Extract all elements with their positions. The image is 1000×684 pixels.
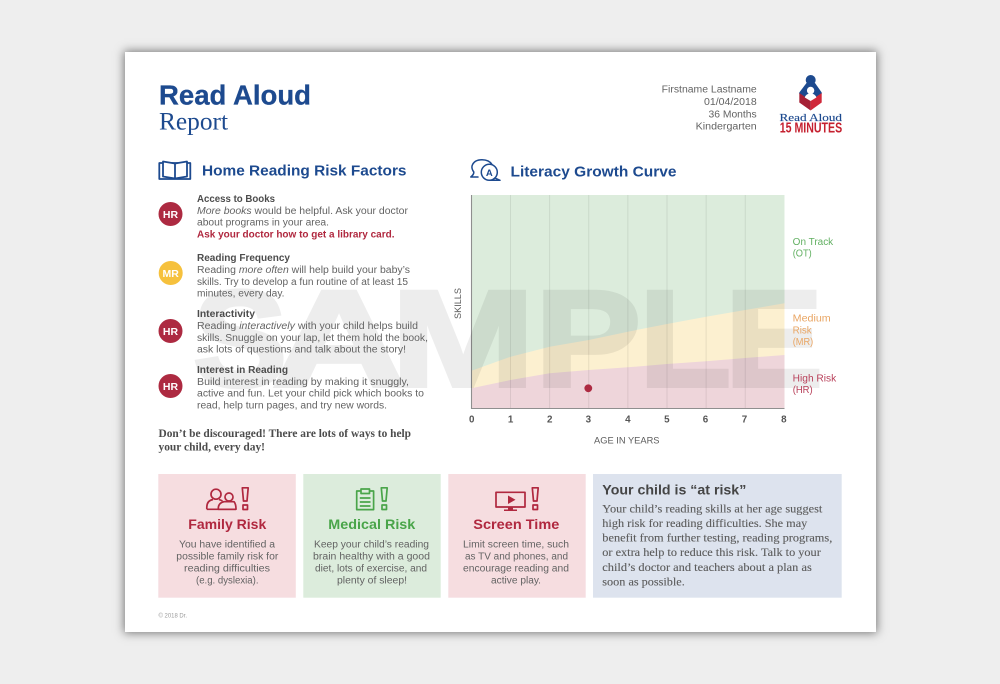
chart axis ticks: 1: [508, 415, 514, 426]
report sheet: [125, 52, 876, 632]
panel: screen time: Limit screen time, such: [463, 540, 569, 551]
chart axis label: skills: SKILLS: [453, 288, 464, 319]
risk item: Access to Books: More books would be helpful. Ask your doctor: [197, 206, 409, 217]
badge: high risk: [158, 202, 182, 226]
icon: family with exclamation: [207, 488, 248, 510]
logo: Read Aloud 15 Minutes: 15 MINUTES: [780, 120, 842, 136]
student details: [662, 85, 757, 133]
title: Report: [159, 108, 228, 136]
risk item: Interest in Reading: Interest in Reading: [197, 365, 288, 376]
panel: screen time: [448, 474, 586, 598]
chart axis ticks: 5: [664, 415, 670, 426]
risk item: Reading Frequency: [159, 253, 410, 300]
panel: literacy growth chart: [472, 195, 784, 408]
badge: high risk: [158, 374, 182, 398]
student details: Firstname Lastname: [662, 85, 757, 96]
panel: medical risk: diet, lots of exercise, and: [315, 564, 427, 574]
panel: your child is at risk: or extra help to reduce this risk. Talk to your: [602, 546, 821, 559]
risk item: Interest in Reading: [158, 365, 425, 412]
chart axis ticks: 2: [547, 415, 553, 426]
risk item: Interactivity: Interactivity: [197, 309, 256, 320]
logo: Read Aloud 15 Minutes: Read Aloud: [780, 112, 843, 124]
watermark: SAMPLE: M: [391, 263, 535, 416]
legend: medium risk: Medium: [793, 314, 831, 325]
risk item: Interactivity: skills. Snuggle on your lap, let them hold the book,: [197, 333, 428, 344]
icon: clipboard with exclamation: [357, 488, 387, 510]
data point: child at age 3: [584, 384, 592, 392]
logo: Read Aloud 15 Minutes: [780, 75, 843, 136]
encouragement note: [158, 428, 411, 454]
icon: open book: [159, 162, 190, 179]
watermark: SAMPLE: E: [725, 263, 823, 416]
chart zone: high risk: [472, 355, 784, 408]
panel: your child is at risk: soon as possible.: [602, 575, 685, 588]
risk item: Interest in Reading: Build interest in reading by making it snuggly,: [197, 377, 409, 388]
encouragement note: your child, every day!: [158, 442, 265, 454]
risk item: Reading Frequency: skills. Try to develop a fun routine of at least 15: [197, 277, 409, 288]
legend: medium risk: (MR): [793, 337, 813, 348]
chart axis label: age in years: AGE IN YEARS: [594, 436, 660, 447]
legend: on track: On Track: [793, 237, 833, 248]
logo mark: [799, 75, 822, 110]
legend: on track: [793, 237, 833, 260]
badge: high risk: HR: [163, 209, 178, 221]
risk item: Interactivity: Reading interactively with your child helps build: [197, 321, 418, 332]
badge: high risk: HR: [163, 326, 178, 338]
chart axis ticks: 7: [742, 415, 748, 426]
chart axis ticks: 0: [469, 415, 475, 426]
student details: Kindergarten: [696, 122, 757, 133]
risk item: Interest in Reading: active and fun. Let your child pick which books to: [197, 389, 425, 400]
legend: on track: (OT): [793, 248, 812, 260]
title: [159, 80, 311, 136]
panel: family risk: You have identified a: [179, 540, 276, 551]
badge: medium risk: [159, 261, 183, 285]
legend: medium risk: Risk: [793, 325, 812, 336]
heading: Home Reading Risk Factors: Home Reading Risk Factors: [202, 164, 406, 180]
badge: medium risk: MR: [163, 268, 179, 280]
panel: screen time: active play.: [491, 576, 541, 586]
panel: family risk: [158, 474, 296, 598]
risk item: Access to Books: about programs in your area.: [197, 218, 329, 229]
student details: 36 Months: [708, 109, 757, 120]
risk item: Interactivity: [158, 309, 428, 356]
risk item: Reading Frequency: Reading more often will help build your baby’s: [197, 265, 410, 276]
icon: screen with exclamation: [496, 488, 538, 511]
panel: family risk: possible family risk for: [176, 552, 279, 563]
icon: speech bubbles with letter A: [471, 160, 500, 180]
chart zone: medium risk: [472, 303, 784, 408]
watermark: SAMPLE: A: [272, 263, 406, 416]
watermark: SAMPLE: [193, 263, 823, 416]
panel: family risk: Family Risk: [188, 516, 266, 532]
chart axis ticks: 4: [625, 415, 631, 426]
risk item: Access to Books: Ask your doctor how to get a library card.: [197, 230, 395, 240]
panel: screen time: as TV and phones, and: [465, 552, 568, 563]
badge: high risk: [158, 319, 182, 343]
panel: medical risk: [303, 474, 441, 598]
risk item: Interactivity: ask lots of questions and talk about the story!: [197, 345, 406, 356]
badge: high risk: HR: [163, 381, 178, 393]
panel: medical risk: plenty of sleep!: [337, 576, 407, 586]
student details: 01/04/2018: [704, 97, 757, 108]
risk item: Reading Frequency: minutes, every day.: [197, 289, 284, 300]
legend: high risk: (HR): [793, 385, 813, 396]
watermark: SAMPLE: P: [535, 263, 641, 416]
chart zone: on track: [472, 195, 784, 408]
panel: medical risk: Medical Risk: [328, 516, 416, 532]
legend: medium risk: [793, 314, 831, 348]
encouragement note: Don’t be discouraged! There are lots of ways to help: [158, 428, 411, 440]
watermark: SAMPLE: S: [193, 263, 287, 416]
panel: screen time: Screen Time: [473, 516, 560, 532]
risk item: Access to Books: Access to Books: [197, 194, 275, 205]
panel: family risk: reading difficulties: [184, 564, 270, 574]
heading: Literacy Growth Curve: Literacy Growth Curve: [510, 164, 676, 180]
footer copyright: © 2018 Dr.: [158, 612, 187, 619]
panel: your child is at risk: Your child is “at risk”: [602, 482, 746, 498]
panel: medical risk: Keep your child’s reading: [314, 540, 429, 551]
risk item: Reading Frequency: Reading Frequency: [197, 253, 291, 264]
icon: speech bubbles with letter A: A: [486, 168, 493, 179]
panel: your child is at risk: high risk for reading difficulties. She may: [602, 517, 808, 530]
title: Read Aloud: [159, 80, 311, 110]
panel: your child is at risk: benefit from further testing, reading programs,: [602, 531, 832, 544]
risk item: Interest in Reading: read, help turn pages, and try new words.: [197, 400, 387, 412]
chart axis ticks: 6: [703, 415, 709, 426]
panel: your child is at risk: child’s doctor and teachers about a plan as: [602, 561, 812, 574]
chart axis ticks: 8: [781, 415, 787, 426]
chart axis ticks: [469, 415, 787, 426]
risk item: Access to Books: [158, 194, 409, 240]
panel: family risk: (e.g. dyslexia).: [196, 576, 258, 586]
legend: high risk: [793, 374, 836, 396]
panel: your child is at risk: Your child’s reading skills at her age suggest: [602, 502, 823, 515]
panel: medical risk: brain healthy with a good: [313, 552, 430, 563]
panel: your child is at risk: [593, 474, 842, 598]
watermark: SAMPLE: L: [639, 263, 731, 416]
chart axis ticks: 3: [586, 415, 592, 426]
panel: screen time: encourage reading and: [463, 564, 569, 574]
legend: high risk: High Risk: [793, 374, 836, 385]
